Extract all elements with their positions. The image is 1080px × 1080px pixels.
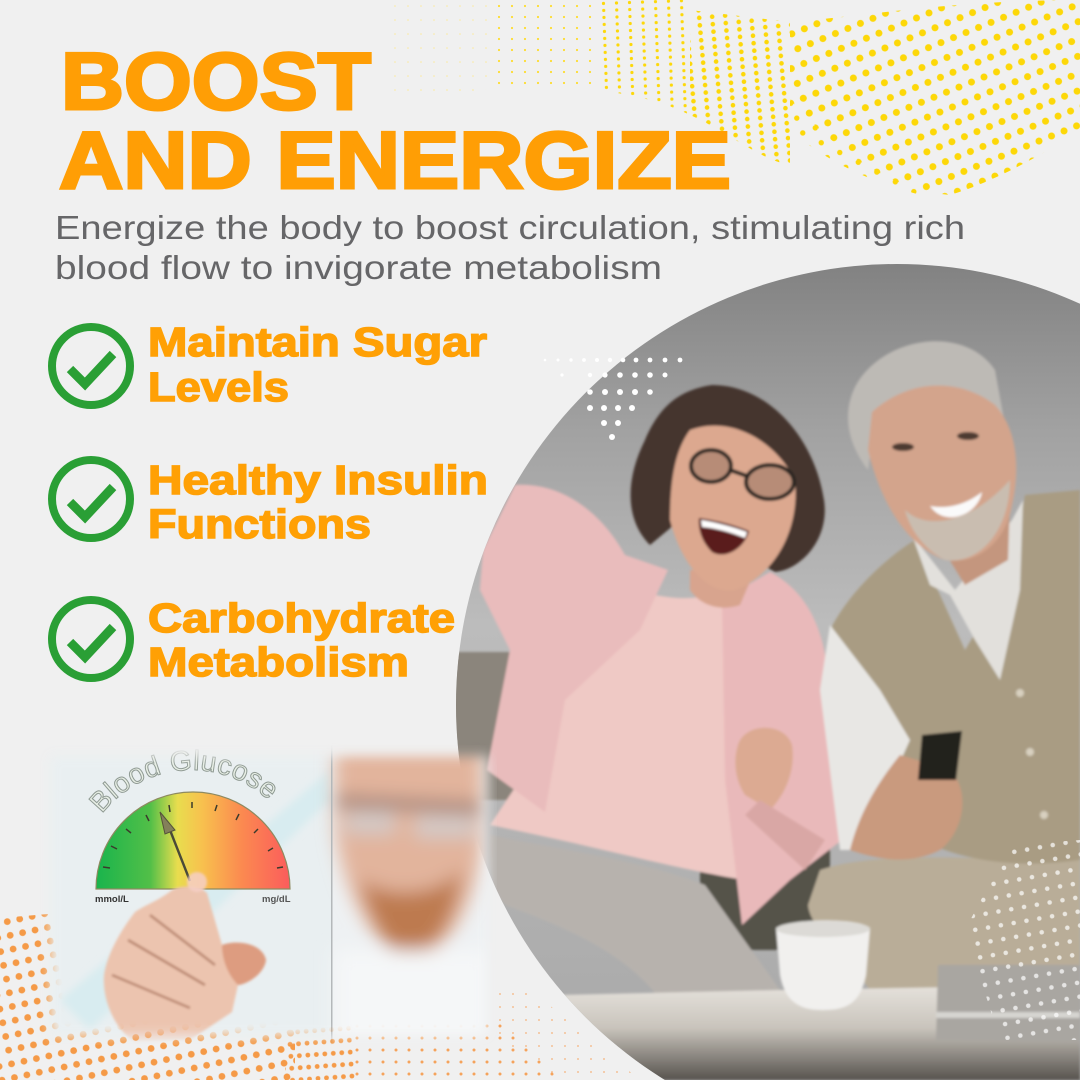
white dots on man's legs [965, 840, 1080, 1040]
woman trousers [494, 882, 778, 992]
woman neck [690, 570, 755, 608]
gauge unit right: mg/dL [262, 894, 291, 905]
benefit: maintain sugar levels [52, 319, 487, 410]
woman pink top [490, 575, 745, 880]
man neck [950, 518, 1010, 586]
woman fist [735, 728, 793, 810]
gauge needle [160, 812, 190, 881]
pointing hand [104, 872, 266, 1042]
woman raised arm and cardigan [480, 485, 668, 812]
man forearm and hand [850, 755, 962, 859]
subtitle line 1: Energize the body to boost circulation, stimulating rich [55, 209, 965, 246]
title line 2: AND ENERGIZE [59, 116, 731, 206]
benefit: carbohydrate metabolism [52, 595, 455, 685]
vest buttons [1016, 689, 1048, 819]
man face [868, 386, 1016, 561]
orange halftone wave [0, 914, 640, 1080]
woman hair [631, 385, 825, 572]
woman [480, 385, 842, 993]
benefit text [148, 595, 455, 685]
benefit text [148, 319, 487, 410]
icon: check circle [52, 327, 130, 405]
man [808, 341, 1080, 990]
title line 1: BOOST [61, 37, 371, 127]
benefit: healthy insulin functions [52, 457, 488, 547]
man sleeve [820, 625, 910, 850]
benefit text: Healthy Insulin [148, 457, 488, 503]
sofa [450, 652, 830, 950]
circular photo: senior couple on sofa [440, 250, 1080, 1080]
book [936, 965, 1080, 1042]
woman right cardigan [722, 572, 842, 925]
coffee table [560, 985, 1080, 1080]
gauge ticks [103, 802, 283, 868]
icon: check circle [52, 460, 130, 538]
woman open mouth [699, 518, 749, 555]
icon: check circle [52, 600, 130, 678]
tv remote [918, 731, 962, 780]
man trousers [808, 858, 1080, 990]
man beard and smile [905, 480, 1010, 560]
gauge unit left: mmol/L [95, 894, 129, 905]
benefit text: Maintain Sugar [148, 319, 487, 365]
yellow halftone wave [385, 0, 1080, 196]
blurred doctor [322, 750, 489, 960]
benefit text [148, 457, 488, 547]
benefit text: Metabolism [148, 639, 409, 685]
man vest [830, 490, 1080, 864]
blood glucose photo [40, 748, 496, 1045]
benefit text: Carbohydrate [148, 595, 455, 641]
white cup [776, 920, 870, 1010]
gauge title: Blood Glucose [88, 750, 276, 813]
woman face [670, 426, 796, 590]
divider line [331, 745, 332, 1045]
benefit text: Levels [148, 364, 289, 410]
woman glasses [691, 450, 794, 499]
man hair [848, 341, 1005, 470]
gauge [96, 792, 290, 889]
white dots near couple [544, 358, 682, 440]
subtitle [55, 209, 965, 286]
title [59, 37, 731, 206]
man eyes [892, 432, 979, 451]
benefit text: Functions [148, 501, 371, 547]
subtitle line 2: blood flow to invigorate metabolism [55, 249, 662, 286]
man collar and shirt [912, 500, 1023, 680]
